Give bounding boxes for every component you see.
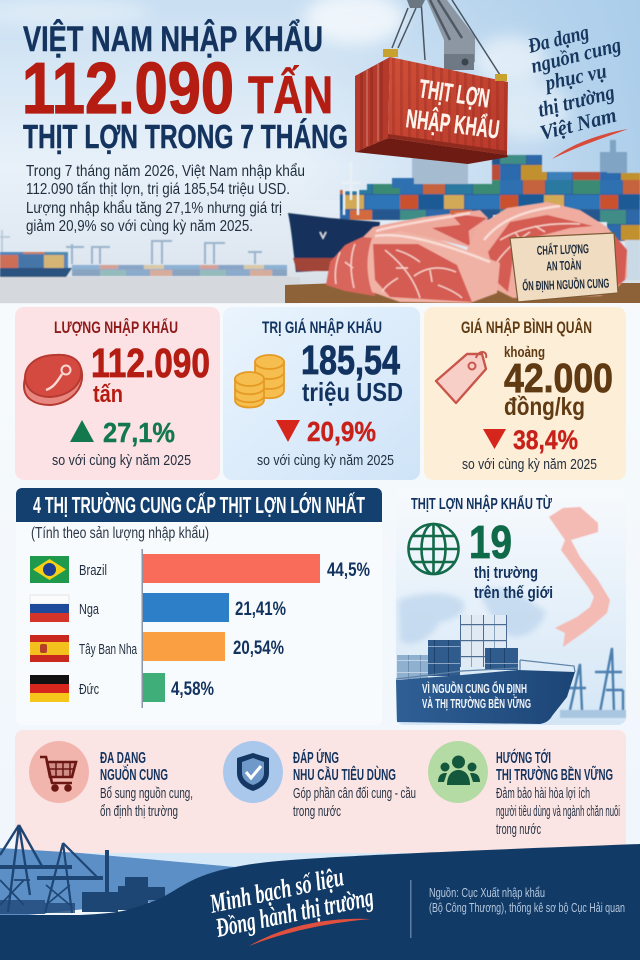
panel: key benefits [15, 730, 626, 870]
slogan: phục vụ [541, 59, 609, 95]
ship text [422, 681, 531, 711]
benefit: meeting demand: trong nước [293, 804, 341, 820]
slogan: nguồn cung [528, 32, 623, 78]
flag: Russia [30, 595, 69, 622]
icon: coins [235, 355, 284, 408]
title: 112.090 [22, 49, 234, 129]
panel: source markets: 19 [469, 516, 512, 568]
footer light band [80, 853, 640, 870]
trend up [70, 420, 94, 442]
distant harbour [0, 230, 300, 303]
crane [392, 0, 500, 75]
flag: Germany [30, 675, 69, 702]
card: average price: đồng/kg [504, 393, 585, 421]
quality sign [510, 233, 618, 302]
bar chart: 20,54% [233, 638, 284, 659]
card: import volume [15, 307, 220, 480]
flag: Spain [30, 635, 69, 662]
benefit: sustainable market [428, 741, 620, 838]
card: import volume: so với cùng kỳ năm 2025 [52, 453, 191, 469]
benefit: diverse supply: Bổ sung nguồn cung, [100, 786, 193, 802]
container label: THỊT LỢN [417, 73, 492, 113]
red swoosh [552, 129, 628, 159]
quality sign: CHẤT LƯỢNG [537, 241, 589, 258]
bar: Germany [143, 673, 165, 702]
title: VIỆT NAM NHẬP KHẨU [23, 19, 323, 59]
trend down [276, 420, 300, 442]
benefit: diverse supply [29, 741, 193, 820]
card: import volume: LƯỢNG NHẬP KHẨU [54, 318, 178, 337]
container sides [355, 138, 508, 164]
tagline [206, 861, 376, 943]
tagline: Đồng hành thị trường [213, 882, 376, 943]
Vietnam map [549, 507, 610, 647]
card: import value: so với cùng kỳ năm 2025 [257, 453, 394, 469]
quality sign: AN TOÀN [546, 257, 582, 274]
pork cut: right [466, 202, 627, 298]
panel: source markets: trên thế giới [474, 583, 553, 602]
card: average price: 38,4% [513, 425, 578, 455]
benefit: diverse supply: NGUỒN CUNG [100, 765, 168, 784]
title: TẤN [248, 65, 333, 125]
panel: top 4 markets chart: Nga [79, 601, 99, 618]
shipping container [355, 49, 508, 164]
card: import value: 185,54 [301, 337, 400, 383]
intro paragraph: Lượng nhập khẩu tăng 27,1% nhưng giá trị [26, 200, 282, 217]
trend down [483, 429, 506, 449]
container label [404, 73, 501, 144]
card: average price [424, 307, 626, 480]
red swoosh [249, 919, 371, 946]
bar chart [142, 549, 370, 708]
benefit: diverse supply: ĐA DẠNG [100, 750, 146, 767]
card: average price: GIÁ NHẬP BÌNH QUÂN [461, 318, 592, 337]
chart heading [16, 488, 382, 522]
port tower [600, 140, 627, 177]
bar: Brazil [143, 554, 320, 583]
card: average price: 42.000 [504, 355, 613, 401]
benefit: sustainable market: HƯỚNG TỚI [496, 748, 551, 767]
card: import volume: 112.090 [91, 340, 210, 386]
icon: steak [24, 355, 82, 405]
cargo ship [396, 615, 575, 724]
icon: shield [237, 753, 269, 791]
icon: cart [40, 757, 76, 790]
panel: top 4 markets chart [16, 488, 382, 725]
intro paragraph: giảm 20,9% so với cùng kỳ năm 2025. [26, 218, 253, 235]
chart heading: 4 THỊ TRƯỜNG CUNG CẤP THỊT LỢN LỚN NHẤT [33, 491, 365, 518]
container stacks [340, 140, 640, 280]
flag: Brazil [30, 556, 69, 583]
port silhouette [0, 825, 165, 914]
tagline: Minh bạch số liệu [206, 861, 346, 919]
footer hill [0, 848, 235, 918]
card: average price: khoảng [504, 344, 545, 361]
ship text: VÌ NGUỒN CUNG ỔN ĐỊNH [422, 681, 527, 696]
cargo ship [288, 162, 380, 272]
footer [0, 825, 640, 960]
benefit: sustainable market: trong nước [496, 822, 541, 838]
pork cut: front [326, 231, 500, 303]
slogan: Đa dạng [525, 20, 591, 58]
title: THỊT LỢN TRONG 7 THÁNG [23, 118, 348, 155]
benefit: diverse supply: ổn định thị trường [100, 804, 178, 820]
card: import value: TRỊ GIÁ NHẬP KHẨU [262, 318, 382, 337]
bar chart: 4,58% [171, 679, 214, 700]
card: import volume: 27,1% [103, 417, 175, 448]
bar: Spain [143, 632, 225, 661]
panel: source markets: THỊT LỢN NHẬP KHẨU TỪ [411, 494, 553, 513]
pork cuts [326, 202, 627, 303]
intro paragraph: 112.090 tấn thịt lợn, trị giá 185,54 triệu USD. [26, 181, 290, 198]
card: import volume: tấn [93, 381, 123, 408]
card: average price: so với cùng kỳ năm 2025 [462, 457, 597, 473]
slogan [525, 20, 623, 145]
slogan: thị trường [535, 80, 617, 122]
benefit: meeting demand: Góp phần cân đối cung - cầu [293, 786, 416, 802]
wooden board [285, 283, 640, 303]
bar chart: 44,5% [327, 560, 370, 581]
card: import value [223, 307, 420, 480]
panel: top 4 markets chart: Brazil [79, 562, 107, 579]
icon: globe [408, 524, 458, 574]
icon: price tag [436, 352, 486, 403]
panel: source markets: thị trường [474, 563, 538, 582]
terminal building [412, 158, 468, 188]
hero banner [0, 0, 640, 303]
source note: Nguồn: Cục Xuất nhập khẩu [429, 885, 545, 900]
source note [429, 885, 625, 915]
slogan: Việt Nam [537, 103, 619, 145]
panel: top 4 markets chart: Tây Ban Nha [79, 641, 137, 658]
benefit: meeting demand: ĐÁP ỨNG [293, 748, 339, 767]
container label: NHẬP KHẨU [404, 103, 501, 144]
ship text: VÀ THỊ TRƯỜNG BỀN VỮNG [422, 696, 531, 711]
footer wave [0, 844, 640, 960]
port cranes [560, 648, 626, 714]
panel: source markets [396, 488, 626, 725]
bar chart: 21,41% [235, 599, 286, 620]
bar: Russia [143, 593, 229, 622]
card: import value: 20,9% [307, 416, 376, 447]
panel: top 4 markets chart: Đức [79, 681, 99, 698]
world map [398, 588, 546, 644]
title [22, 19, 348, 155]
hero sky [0, 0, 640, 303]
benefit: meeting demand: NHU CẦU TIÊU DÙNG [293, 765, 396, 784]
intro paragraph: Trong 7 tháng năm 2026, Việt Nam nhập khẩu [26, 163, 305, 180]
panel: top 4 markets chart: (Tính theo sản lượng nhập khẩu) [31, 525, 209, 542]
intro paragraph [26, 163, 305, 235]
pork cut: back left [360, 210, 488, 248]
benefit: meeting demand [223, 741, 416, 820]
card: import value: triệu USD [302, 377, 403, 407]
icon: people [438, 756, 480, 785]
